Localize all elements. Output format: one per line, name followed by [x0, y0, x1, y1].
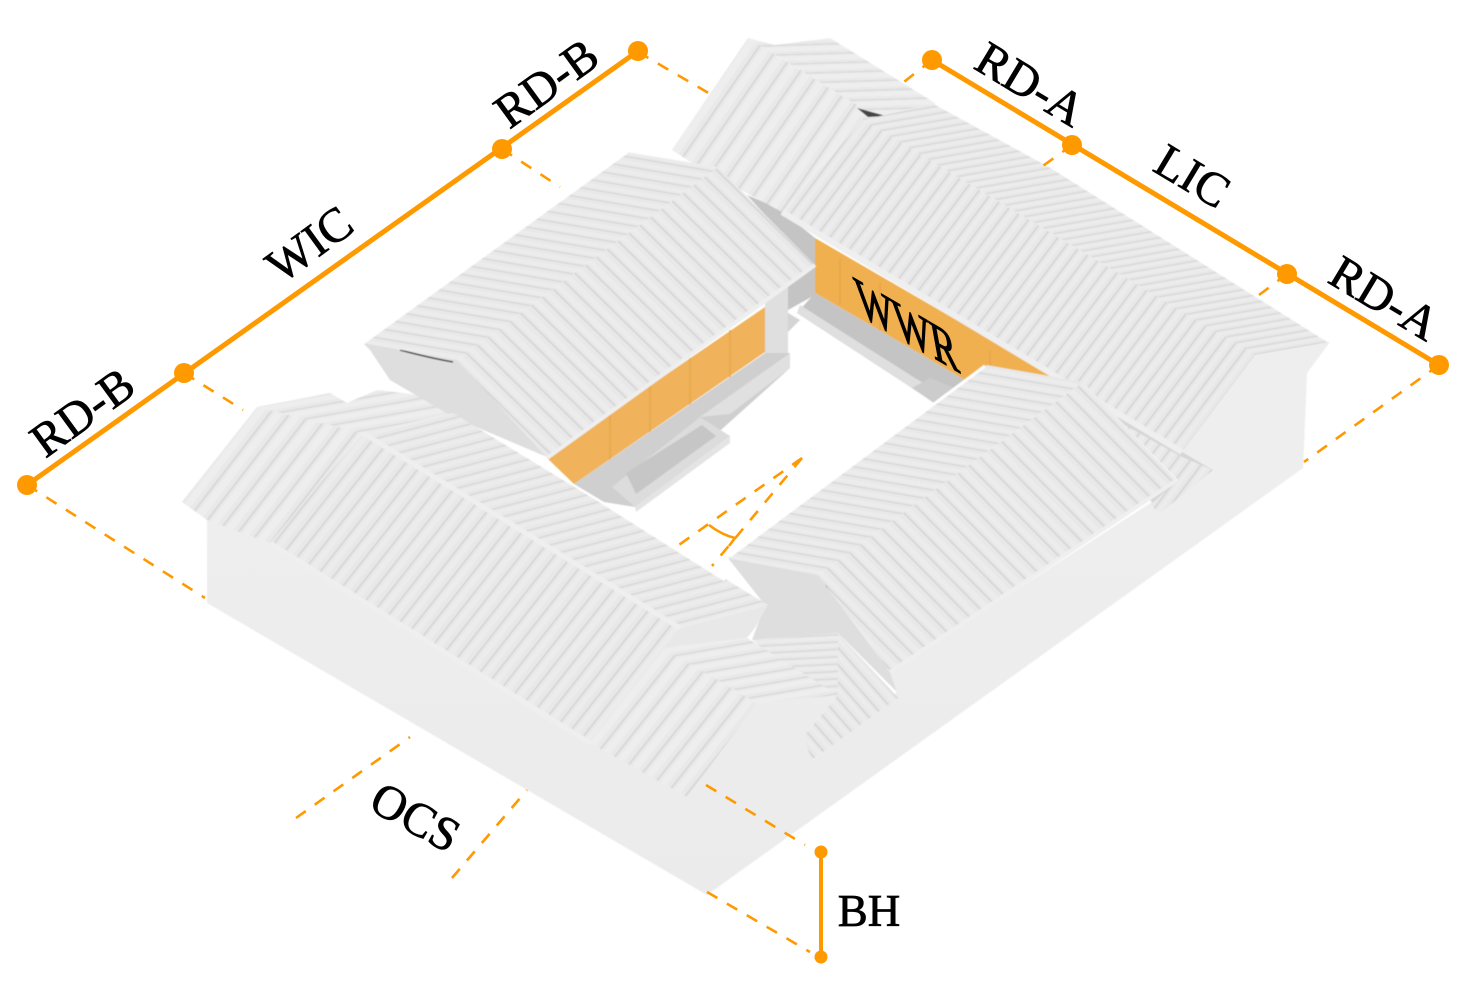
label: WIC: WIC	[256, 196, 363, 293]
east wing gable shade	[728, 558, 897, 692]
east dimension line RD-A / LIC / RD-A	[922, 50, 1449, 375]
small back roof	[753, 633, 898, 760]
north-west corner roof	[672, 38, 935, 212]
south-west corner roof	[182, 390, 453, 543]
west dimension line RD-B / WIC / RD-B	[17, 41, 648, 495]
label: WWR: WWR	[850, 264, 963, 386]
orientation angle marker	[676, 458, 802, 566]
outer walls	[207, 342, 1330, 895]
label: RD-B upper: RD-B	[485, 28, 609, 139]
label: OCS: OCS	[362, 772, 469, 863]
passage between north wings	[747, 195, 815, 310]
west wing orange window wall	[546, 307, 765, 484]
building height marker	[814, 846, 828, 964]
courtyard building model	[182, 38, 1330, 895]
south-east corner roof	[590, 638, 838, 797]
north wing orange window wall	[815, 238, 1060, 380]
north wing plinth and steps	[797, 293, 965, 403]
north wing roof	[782, 103, 1330, 470]
west wing gable shade	[363, 343, 547, 457]
south wing roof	[270, 413, 768, 743]
east wing roof	[728, 365, 1177, 672]
west wing roof	[363, 152, 815, 458]
label: LIC: LIC	[1145, 134, 1239, 219]
west wing pillar and plinth	[574, 285, 800, 507]
west wing steps	[612, 417, 730, 512]
label: RD-B lower: RD-B	[21, 357, 145, 468]
label: RD-A lower: RD-A	[1320, 246, 1448, 352]
label: BH: BH	[838, 886, 900, 936]
east shaded passage and small roof	[1083, 382, 1213, 513]
label: RD-A upper: RD-A	[966, 32, 1094, 138]
